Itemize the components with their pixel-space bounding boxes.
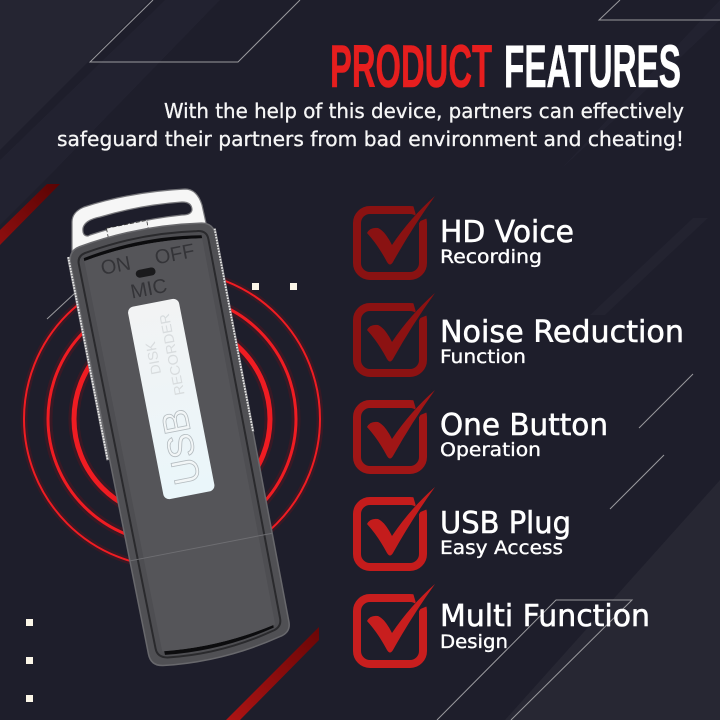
silver edge right <box>214 229 254 432</box>
subtitle <box>57 99 684 151</box>
feature title: USB Plug <box>440 506 571 541</box>
icon: check box <box>357 196 435 276</box>
feature subtitle: Design <box>440 631 508 653</box>
feature: HD Voice Recording <box>357 196 574 276</box>
subtitle: With the help of this device, partners can effectively <box>164 99 684 123</box>
feature: Multi Function Design <box>357 584 650 664</box>
feature title: One Button <box>440 408 608 443</box>
text RECORDER: RECORDER <box>156 312 188 397</box>
white label plate <box>127 298 215 500</box>
mic hole <box>135 267 156 278</box>
feature title: HD Voice <box>440 215 574 250</box>
white dots left <box>26 619 33 702</box>
red sound rings <box>24 271 320 567</box>
USB voice recorder device <box>64 208 295 671</box>
feature title: Noise Reduction <box>440 315 684 350</box>
feature subtitle: Operation <box>440 439 541 461</box>
front panel <box>83 233 279 654</box>
icon: check box <box>357 584 435 664</box>
feature title: Multi Function <box>440 599 650 634</box>
icon: check box <box>357 293 435 373</box>
top black arc <box>83 230 202 261</box>
feature: Noise Reduction Function <box>357 293 684 373</box>
metal tab <box>106 220 150 243</box>
label OFF: OFF <box>153 240 196 269</box>
label MIC: MIC <box>129 275 169 304</box>
silver edge left <box>68 257 108 460</box>
label ON: ON <box>99 252 133 280</box>
icon: check box <box>357 390 435 470</box>
feature subtitle: Function <box>440 346 526 368</box>
feature: USB Plug Easy Access <box>357 487 571 567</box>
silver serrated edge left <box>68 257 108 460</box>
subtitle: safeguard their partners from bad environment and cheating! <box>57 127 684 151</box>
cap seam <box>130 533 272 561</box>
text DISK: DISK <box>142 340 164 376</box>
body shell <box>67 216 295 671</box>
feature subtitle: Easy Access <box>440 537 563 559</box>
white dots top <box>252 283 297 290</box>
red slash bottom <box>226 627 319 720</box>
text USB: USB <box>154 406 208 488</box>
metal loop <box>72 189 208 252</box>
icon: check box <box>357 487 435 567</box>
bottom black arc <box>163 625 275 657</box>
inner black border <box>76 225 286 662</box>
title: PRODUCT <box>330 33 492 100</box>
silver serrated edge right <box>214 229 254 432</box>
red slash top left <box>0 184 60 245</box>
feature subtitle: Recording <box>440 246 542 268</box>
feature: One Button Operation <box>357 390 608 470</box>
